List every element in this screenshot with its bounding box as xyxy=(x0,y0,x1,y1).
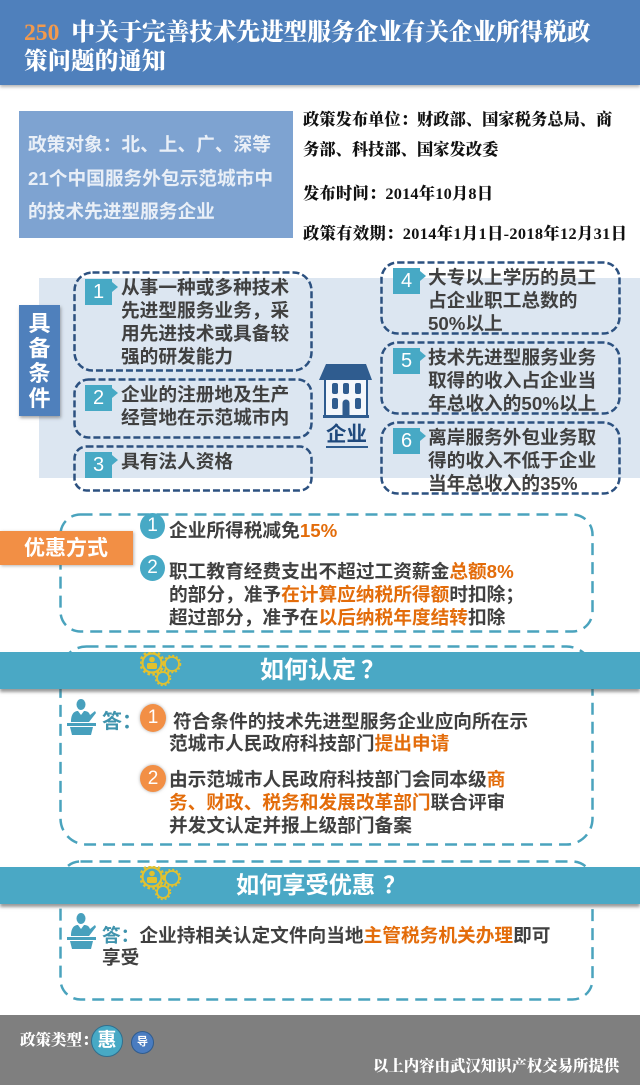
heading band: how to qualify xyxy=(0,652,640,689)
step 2: 由示范城市人民政府科技部门会同本级商 xyxy=(169,769,505,790)
step 2: 并发文认定并报上级部门备案 xyxy=(169,815,412,836)
title: 策问题的通知 xyxy=(24,49,166,75)
title: 250 中关于完善技术先进型服务企业有关企业所得税政 xyxy=(24,20,590,46)
footer xyxy=(0,1015,640,1085)
requirements heading xyxy=(19,305,60,416)
step 2: 务、财政、税务和发展改革部门联合评审 xyxy=(169,792,505,813)
requirements heading: 件 xyxy=(28,386,50,411)
benefit 2 xyxy=(169,561,524,628)
answer text: 答：企业持相关认定文件向当地主管税务机关办理即可 xyxy=(102,925,550,946)
icon: speaker at podium xyxy=(67,699,96,735)
requirement 6: 6 xyxy=(401,430,412,452)
policy type label: 政策类型： xyxy=(20,1032,98,1049)
requirement 1: 从事一种或多种技术 xyxy=(121,277,289,298)
publish date: 发布时间：2014年10月8日 xyxy=(303,184,493,203)
answer text: 享受 xyxy=(102,947,139,968)
requirement 4: 4 xyxy=(401,270,412,292)
policy publisher xyxy=(303,110,612,159)
policy target text: 政策对象：北、上、广、深等 xyxy=(28,134,271,155)
answer label: 答： xyxy=(102,711,142,733)
number 2 xyxy=(140,555,165,581)
requirement 1 xyxy=(73,271,313,372)
step 2 xyxy=(138,763,505,836)
step 1: 范城市人民政府科技部门提出申请 xyxy=(169,733,449,754)
requirement 5 xyxy=(380,341,621,415)
requirement 3: 具有法人资格 xyxy=(121,451,233,472)
icon: gears xyxy=(140,866,182,900)
requirement 2: 企业的注册地及生产 xyxy=(121,384,289,405)
icon: company building xyxy=(319,364,372,418)
preferential methods tag xyxy=(0,531,133,565)
icon: speaker at podium xyxy=(67,913,96,949)
requirement 4: 50%以上 xyxy=(428,313,503,334)
requirement 5: 取得的收入占企业当 xyxy=(428,370,596,391)
step 1 xyxy=(138,702,528,754)
requirement 4 xyxy=(380,261,621,335)
requirements heading: 具 xyxy=(28,311,50,336)
requirement 6: 当年总收入的35% xyxy=(428,473,578,494)
answer text xyxy=(102,925,550,968)
step 1: 符合条件的技术先进型服务企业应向所在示 xyxy=(173,711,528,732)
policy publisher: 政策发布单位：财政部、国家税务总局、商 xyxy=(303,110,612,129)
number 1 xyxy=(140,513,165,539)
requirement 3 xyxy=(73,445,313,492)
requirement 5: 年总收入的50%以上 xyxy=(428,393,596,414)
validity period: 政策有效期：2014年1月1日-2018年12月31日 xyxy=(303,224,627,243)
requirement 2: 经营地在示范城市内 xyxy=(121,407,289,428)
requirements heading: 条 xyxy=(28,361,50,386)
requirement 4: 大专以上学历的员工 xyxy=(428,267,596,288)
badge: preferential xyxy=(91,1025,123,1057)
preferential methods tag: 优惠方式 xyxy=(24,537,108,560)
panel: preferential methods xyxy=(59,513,594,633)
requirement 6 xyxy=(380,421,621,495)
number 1: 1 xyxy=(147,515,158,536)
badge: guidance: 导 xyxy=(137,1036,148,1048)
panel: requirements background band xyxy=(39,278,640,478)
company label: 企业 xyxy=(326,423,367,446)
requirement 1: 1 xyxy=(93,281,104,303)
benefit 1: 企业所得税减免15% xyxy=(169,520,337,541)
badge: guidance xyxy=(131,1031,154,1054)
policy publisher: 务部、科技部、国家发改委 xyxy=(303,140,498,159)
panel: how to qualify xyxy=(59,645,594,846)
heading band: how to qualify: 如何认定？ xyxy=(260,657,385,684)
header banner xyxy=(0,0,640,85)
heading band: how to enjoy: 如何享受优惠 ？ xyxy=(236,872,406,898)
requirement 1: 用先进技术或具备较 xyxy=(121,323,289,344)
requirement 5: 5 xyxy=(401,350,412,372)
benefit 2: 的部分，准予在计算应纳税所得额时扣除； xyxy=(169,584,524,605)
step 2: 2 xyxy=(148,768,158,789)
icon: gears xyxy=(140,652,182,686)
requirement 1: 强的研发能力 xyxy=(121,346,233,367)
number 2: 2 xyxy=(147,557,158,578)
requirement 6: 离岸服务外包业务取 xyxy=(428,427,596,448)
badge: preferential: 惠 xyxy=(97,1030,116,1051)
panel: policy target xyxy=(19,111,293,238)
requirement 5: 技术先进型服务业务 xyxy=(428,347,596,368)
requirements heading: 备 xyxy=(28,336,50,361)
benefit 2: 超过部分，准予在以后纳税年度结转扣除 xyxy=(169,607,505,628)
heading band: how to enjoy xyxy=(0,867,640,904)
title xyxy=(24,19,590,75)
source credit: 以上内容由武汉知识产权交易所提供 xyxy=(373,1058,619,1075)
requirement 4: 占企业职工总数的 xyxy=(428,290,578,311)
requirement 1: 先进型服务业务，采 xyxy=(121,300,289,321)
policy target text: 21个中国服务外包示范城市中 xyxy=(28,168,273,188)
step 1: 1 xyxy=(148,707,158,728)
requirement 2 xyxy=(73,378,313,439)
requirement 3: 3 xyxy=(93,454,104,476)
requirement 6: 得的收入不低于企业 xyxy=(428,450,596,471)
panel: how to enjoy xyxy=(59,860,594,1001)
policy target text: 的技术先进型服务企业 xyxy=(28,201,215,222)
benefit 2: 职工教育经费支出不超过工资薪金总额8% xyxy=(169,561,514,582)
policy target text xyxy=(28,134,273,222)
requirement 2: 2 xyxy=(93,387,104,409)
